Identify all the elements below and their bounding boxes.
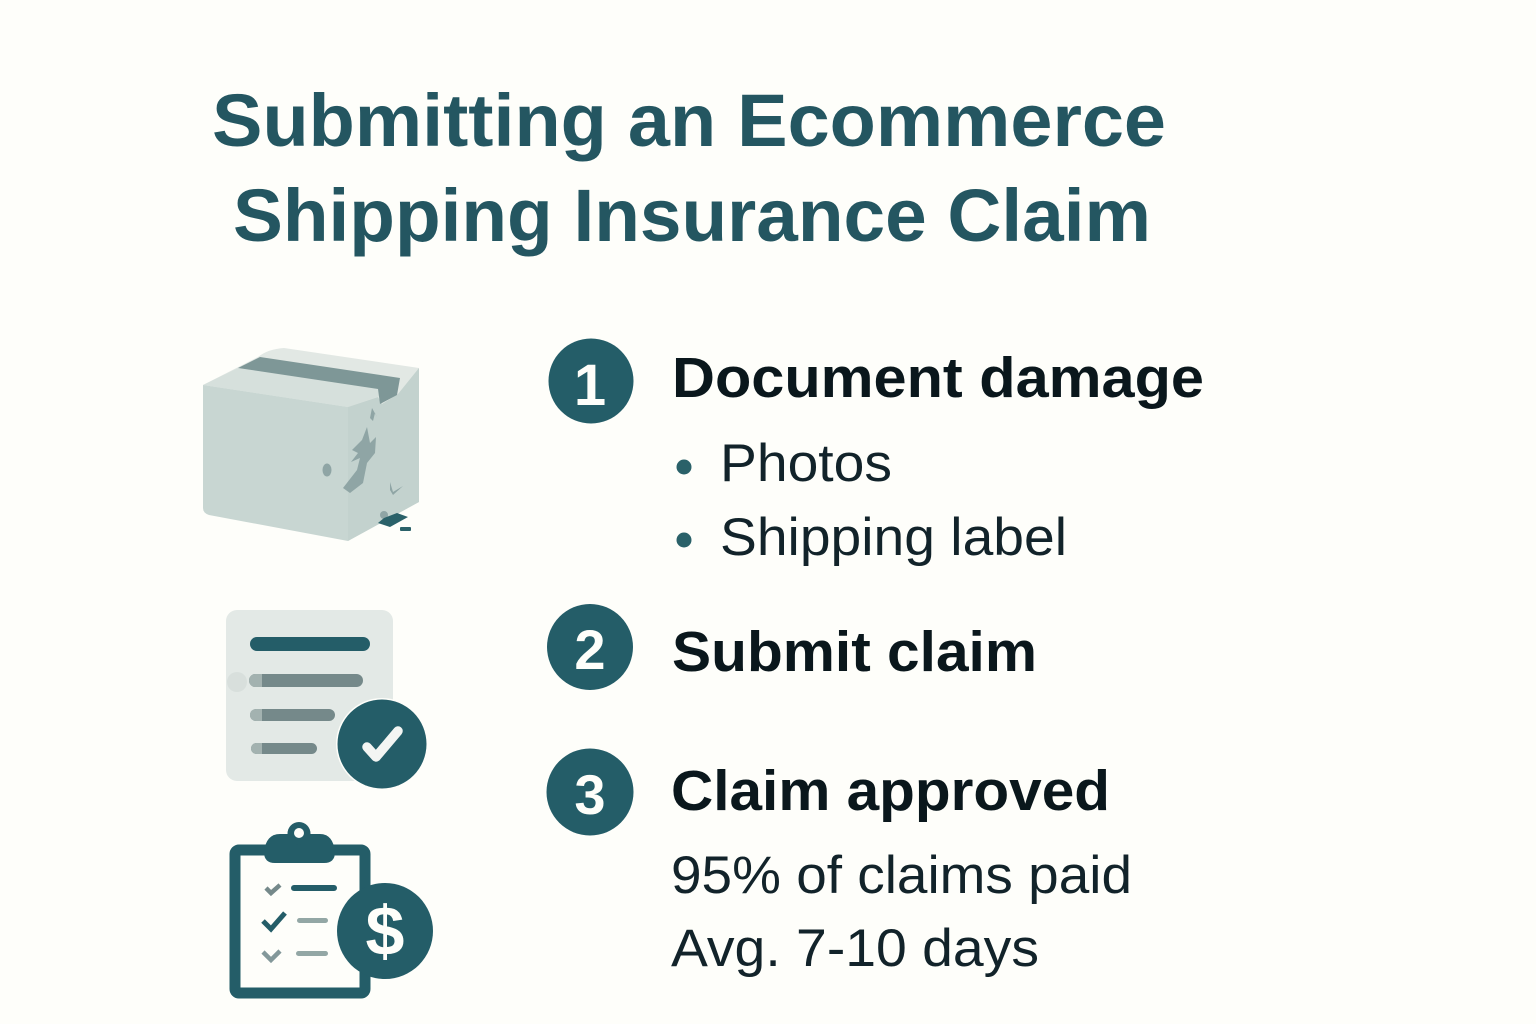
icon: document with check (226, 610, 428, 790)
step 3 heading: Claim approved (671, 759, 1110, 823)
step 3 details (671, 846, 1132, 978)
step 1 bullets: Shipping label (720, 508, 1067, 567)
step 3 details: Avg. 7-10 days (671, 919, 1039, 978)
step 1 badge: 1 (574, 353, 606, 418)
title (212, 79, 1166, 257)
step 1 bullets: Photos (720, 434, 892, 493)
step 2 badge (547, 604, 633, 690)
step 1 bullets (676, 434, 1067, 567)
title: Shipping Insurance Claim (233, 174, 1151, 257)
step 1 heading: Document damage (672, 346, 1204, 410)
icon: clipboard with dollar (235, 822, 433, 993)
step 1 badge (548, 338, 634, 424)
step 3 badge: 3 (574, 763, 606, 826)
step 3 details: 95% of claims paid (671, 846, 1132, 905)
step 2 badge: 2 (574, 618, 606, 681)
step 3 badge (546, 748, 634, 836)
icon: clipboard with dollar: $ (366, 892, 404, 970)
icon: damaged box (203, 348, 419, 541)
step 2 heading: Submit claim (672, 620, 1037, 684)
title: Submitting an Ecommerce (212, 79, 1166, 162)
